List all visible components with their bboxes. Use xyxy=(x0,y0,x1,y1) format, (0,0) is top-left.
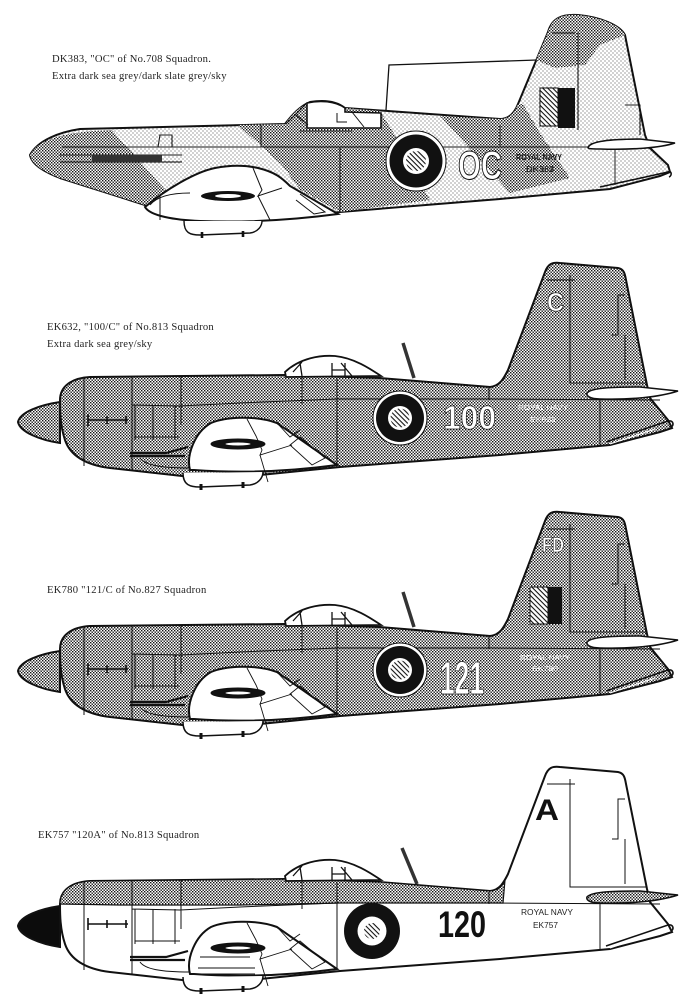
spinner xyxy=(18,402,60,443)
aircraft profile: EK780 xyxy=(18,512,678,739)
fin flash xyxy=(530,587,562,624)
belly tank xyxy=(183,721,263,739)
aircraft profile: EK632 xyxy=(18,263,678,490)
caption: EK780: EK780 "121/C of No.827 Squadron xyxy=(47,585,207,596)
serial: ROYAL NAVY xyxy=(518,403,568,412)
wing xyxy=(189,418,337,472)
tail hook xyxy=(606,670,673,693)
camouflage: centre band xyxy=(238,102,430,212)
roundel xyxy=(386,131,446,191)
gun xyxy=(130,447,190,468)
spinner xyxy=(18,906,60,947)
panel lines xyxy=(84,275,660,470)
tailplane xyxy=(587,891,678,903)
wing xyxy=(189,922,337,976)
wing markings xyxy=(211,668,325,731)
tailplane xyxy=(587,387,678,399)
caption: DK383: DK383, "OC" of No.708 Squadron. xyxy=(52,54,211,65)
roundel xyxy=(373,643,427,697)
gun xyxy=(130,696,190,717)
radio mast and wire xyxy=(386,60,537,110)
camouflage: fin tip xyxy=(536,15,625,68)
aircraft profile: DK383 xyxy=(30,15,675,238)
wing roundel and panels xyxy=(150,168,325,220)
wing xyxy=(145,166,338,222)
upper surface band xyxy=(60,879,505,905)
fin letter A: A xyxy=(535,794,559,827)
wing underside stripes xyxy=(198,957,255,980)
aerial mast xyxy=(402,848,417,884)
tailplane xyxy=(588,139,675,149)
caption: EK632: EK632, "100/C" of No.813 Squadron xyxy=(47,322,214,333)
camouflage: rear band xyxy=(440,104,570,193)
fuselage xyxy=(60,512,672,727)
code 100: 100 xyxy=(443,399,496,436)
belly tank xyxy=(184,221,262,238)
tailplane xyxy=(587,636,678,648)
wing markings xyxy=(211,923,325,986)
belly tank xyxy=(183,472,263,490)
caption: EK757: EK757 "120A" of No.813 Squadron xyxy=(38,830,200,841)
roundel xyxy=(373,391,427,445)
serial: EK757 xyxy=(533,921,559,930)
fin letter C: C xyxy=(547,287,564,317)
aerial mast xyxy=(403,592,414,627)
code letters OC: OC xyxy=(458,144,502,188)
panel lines xyxy=(84,779,660,974)
serial xyxy=(521,908,574,930)
code 120: 120 xyxy=(438,904,486,945)
canopy xyxy=(307,101,381,128)
caption: EK632 colours: Extra dark sea grey/sky xyxy=(47,339,153,350)
serial: EK632 xyxy=(530,415,556,424)
canopy framing xyxy=(286,104,364,131)
camouflage: nose xyxy=(30,130,172,205)
spinner xyxy=(18,651,60,692)
pilot frame xyxy=(293,866,352,880)
panel lines xyxy=(84,524,660,719)
fuselage xyxy=(60,767,672,982)
serial xyxy=(520,653,570,673)
wing markings xyxy=(211,419,325,482)
serial: DK383 xyxy=(526,165,555,174)
code 121: 121 xyxy=(440,652,484,704)
nose stencil band xyxy=(92,155,162,162)
tail hook xyxy=(600,172,671,187)
aircraft profile: EK757 xyxy=(18,767,678,994)
fuselage xyxy=(60,263,672,478)
tail hook xyxy=(606,925,673,948)
fin letters FD: FD xyxy=(542,534,564,557)
serial xyxy=(516,153,563,174)
canopy xyxy=(285,356,381,377)
canopy xyxy=(285,860,381,881)
caption: DK383 colours: Extra dark sea grey/dark slate grey/sky xyxy=(52,71,227,82)
serial: ROYAL NAVY xyxy=(520,653,570,662)
serial: EK780 xyxy=(532,664,558,673)
gun xyxy=(130,951,190,972)
fin flash xyxy=(540,88,575,128)
tail hook xyxy=(606,421,673,444)
fuselage camouflage base xyxy=(30,15,670,222)
panel lines xyxy=(60,33,655,212)
pilot frame xyxy=(293,611,352,625)
serial: ROYAL NAVY xyxy=(516,153,563,162)
pilot frame xyxy=(293,362,352,376)
serial: ROYAL NAVY xyxy=(521,908,574,917)
roundel xyxy=(344,903,400,959)
aerial mast xyxy=(403,343,414,378)
canopy xyxy=(285,605,381,626)
serial xyxy=(518,403,568,424)
wing xyxy=(189,667,337,721)
belly tank xyxy=(183,976,263,994)
